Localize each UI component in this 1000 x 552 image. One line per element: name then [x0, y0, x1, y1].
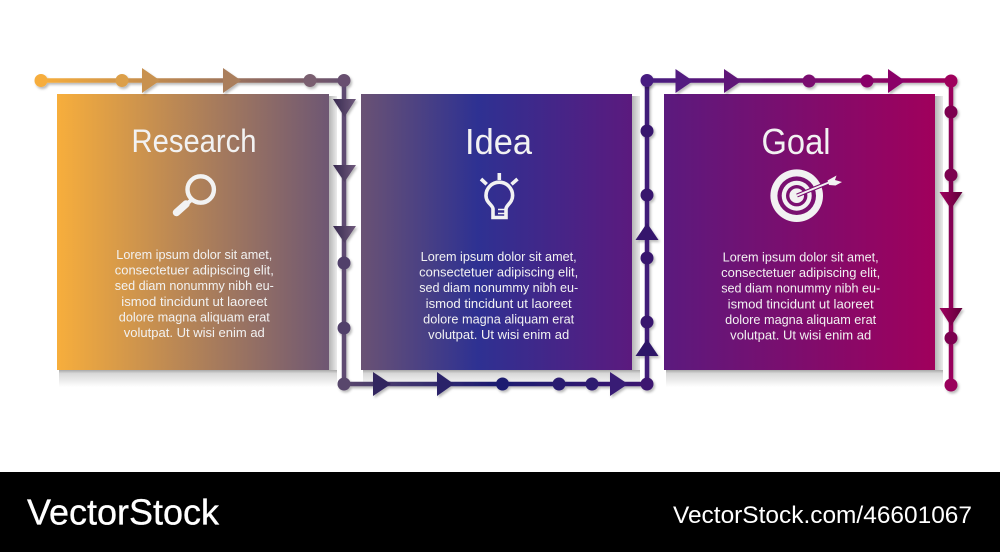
- text block: idea body: volutpat. Ut wisi enim ad: [428, 328, 569, 342]
- text block: goal body: Lorem ipsum dolor sit amet,: [723, 250, 879, 264]
- icon: magnifying glass: [176, 176, 214, 212]
- panel: goal card: [664, 94, 943, 387]
- text block: idea body: sed diam nonummy nibh eu-: [419, 281, 578, 295]
- arrow path: idea segment: [338, 80, 658, 396]
- icon: light bulb: [481, 173, 518, 218]
- text block: goal body: [721, 250, 880, 342]
- text block: idea body: consectetuer adipiscing elit,: [419, 266, 578, 280]
- text block: goal body: sed diam nonummy nibh eu-: [721, 282, 880, 296]
- text block: research body: volutpat. Ut wisi enim ad: [124, 326, 265, 340]
- text block: idea body: ismod tincidunt ut laoreet: [426, 297, 572, 311]
- panel: idea card: [361, 94, 640, 387]
- text block: idea body: [419, 250, 578, 342]
- icon: target with arrow: [770, 169, 842, 222]
- text block: goal body: ismod tincidunt ut laoreet: [728, 297, 874, 311]
- footer logo text: VectorStock: [27, 492, 220, 532]
- heading: Research: Research: [132, 123, 256, 159]
- heading: Goal: Goal: [762, 121, 830, 162]
- text block: goal body: dolore magna aliquam erat: [725, 313, 877, 327]
- text block: research body: sed diam nonummy nibh eu-: [115, 279, 274, 293]
- arrow path: research segment: [34, 68, 356, 384]
- text block: idea body: Lorem ipsum dolor sit amet,: [421, 250, 577, 264]
- arrow path: goal segment: [640, 69, 962, 392]
- text block: goal body: volutpat. Ut wisi enim ad: [730, 328, 871, 342]
- text block: goal body: consectetuer adipiscing elit,: [721, 266, 880, 280]
- footer: black watermark bar: [0, 472, 1000, 552]
- text block: research body: Lorem ipsum dolor sit amet,: [116, 248, 272, 262]
- text block: idea body: dolore magna aliquam erat: [423, 312, 575, 326]
- text block: research body: ismod tincidunt ut laoreet: [121, 295, 268, 309]
- text block: research body: consectetuer adipiscing elit,: [115, 264, 274, 278]
- text block: research body: dolore magna aliquam erat: [119, 310, 270, 324]
- footer url text: VectorStock.com/46601067: [673, 502, 972, 529]
- text block: research body: [115, 248, 274, 340]
- panel: research card: [57, 94, 337, 387]
- heading: Idea: Idea: [465, 121, 533, 162]
